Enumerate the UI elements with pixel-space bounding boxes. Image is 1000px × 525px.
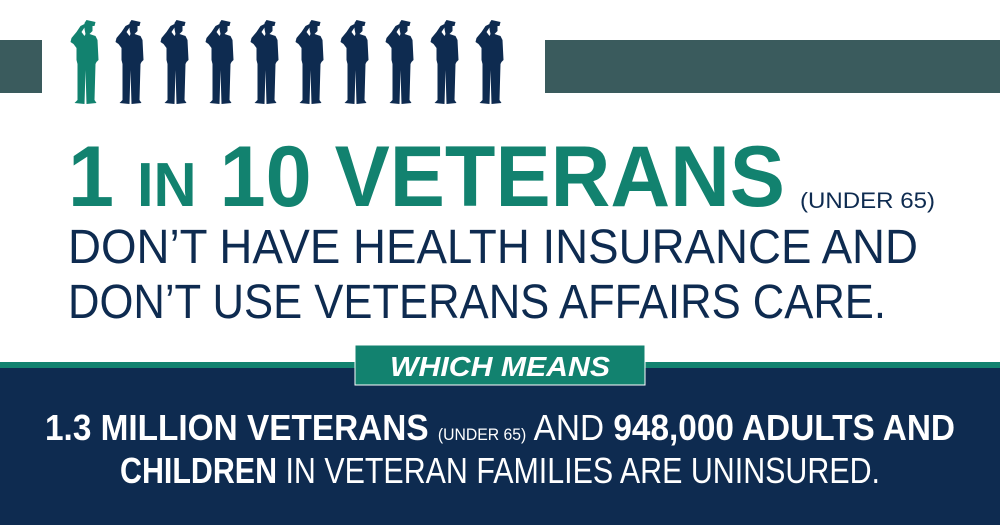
which means label — [355, 345, 645, 385]
bottom statement line 2: CHILDREN IN VETERAN FAMILIES ARE UNINSURED. — [120, 450, 880, 491]
subtitle line 1: DON’T HAVE HEALTH INSURANCE AND — [68, 221, 918, 274]
header bar left — [0, 40, 42, 93]
header bar right — [545, 40, 1000, 93]
subtitle line 2: DON’T USE VETERANS AFFAIRS CARE. — [68, 276, 886, 329]
under 65 note: (UNDER 65) — [800, 188, 935, 213]
bottom panel — [0, 362, 1000, 368]
which means label: WHICH MEANS — [390, 351, 610, 382]
soldiers row — [70, 20, 504, 104]
bottom statement line 1: 1.3 MILLION VETERANS (UNDER 65) AND 948,000 ADULTS AND — [45, 407, 955, 448]
title: 1 IN 10 VETERANS — [68, 129, 785, 225]
